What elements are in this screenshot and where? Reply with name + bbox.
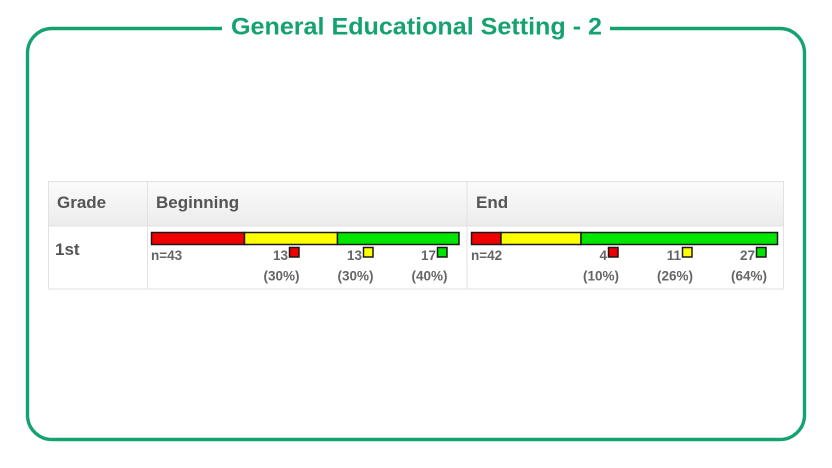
title: General Educational Setting - 2	[231, 14, 602, 40]
beginning counts and percentages	[151, 248, 448, 284]
heading: Grade: Grade	[57, 193, 106, 212]
end counts and percentages: n=42	[471, 248, 502, 263]
beginning counts and percentages: n=43	[151, 248, 183, 263]
beginning counts and percentages: (30%)	[337, 268, 374, 284]
end counts and percentages: 27	[740, 248, 755, 263]
beginning counts and percentages: (40%)	[411, 268, 448, 284]
beginning counts and percentages: 17	[421, 248, 436, 263]
beginning counts and percentages: 13	[273, 248, 288, 263]
end counts and percentages: (26%)	[657, 268, 693, 284]
table body row	[48, 226, 784, 289]
row label: 1st: 1st	[55, 240, 80, 259]
end counts and percentages: 11	[667, 248, 681, 263]
end counts and percentages: (10%)	[583, 268, 619, 284]
beginning counts and percentages: (30%)	[263, 268, 300, 284]
stacked bar: end	[472, 232, 778, 244]
stacked bar: beginning	[152, 232, 459, 244]
column dividers	[148, 182, 467, 289]
end counts and percentages: 4	[599, 248, 607, 263]
table header row	[48, 182, 784, 226]
beginning counts and percentages: 13	[347, 248, 362, 263]
end counts and percentages	[471, 248, 767, 284]
heading: End: End	[476, 193, 508, 212]
end counts and percentages: (64%)	[731, 268, 767, 284]
heading: Beginning: Beginning	[156, 193, 239, 212]
data table	[48, 182, 784, 289]
